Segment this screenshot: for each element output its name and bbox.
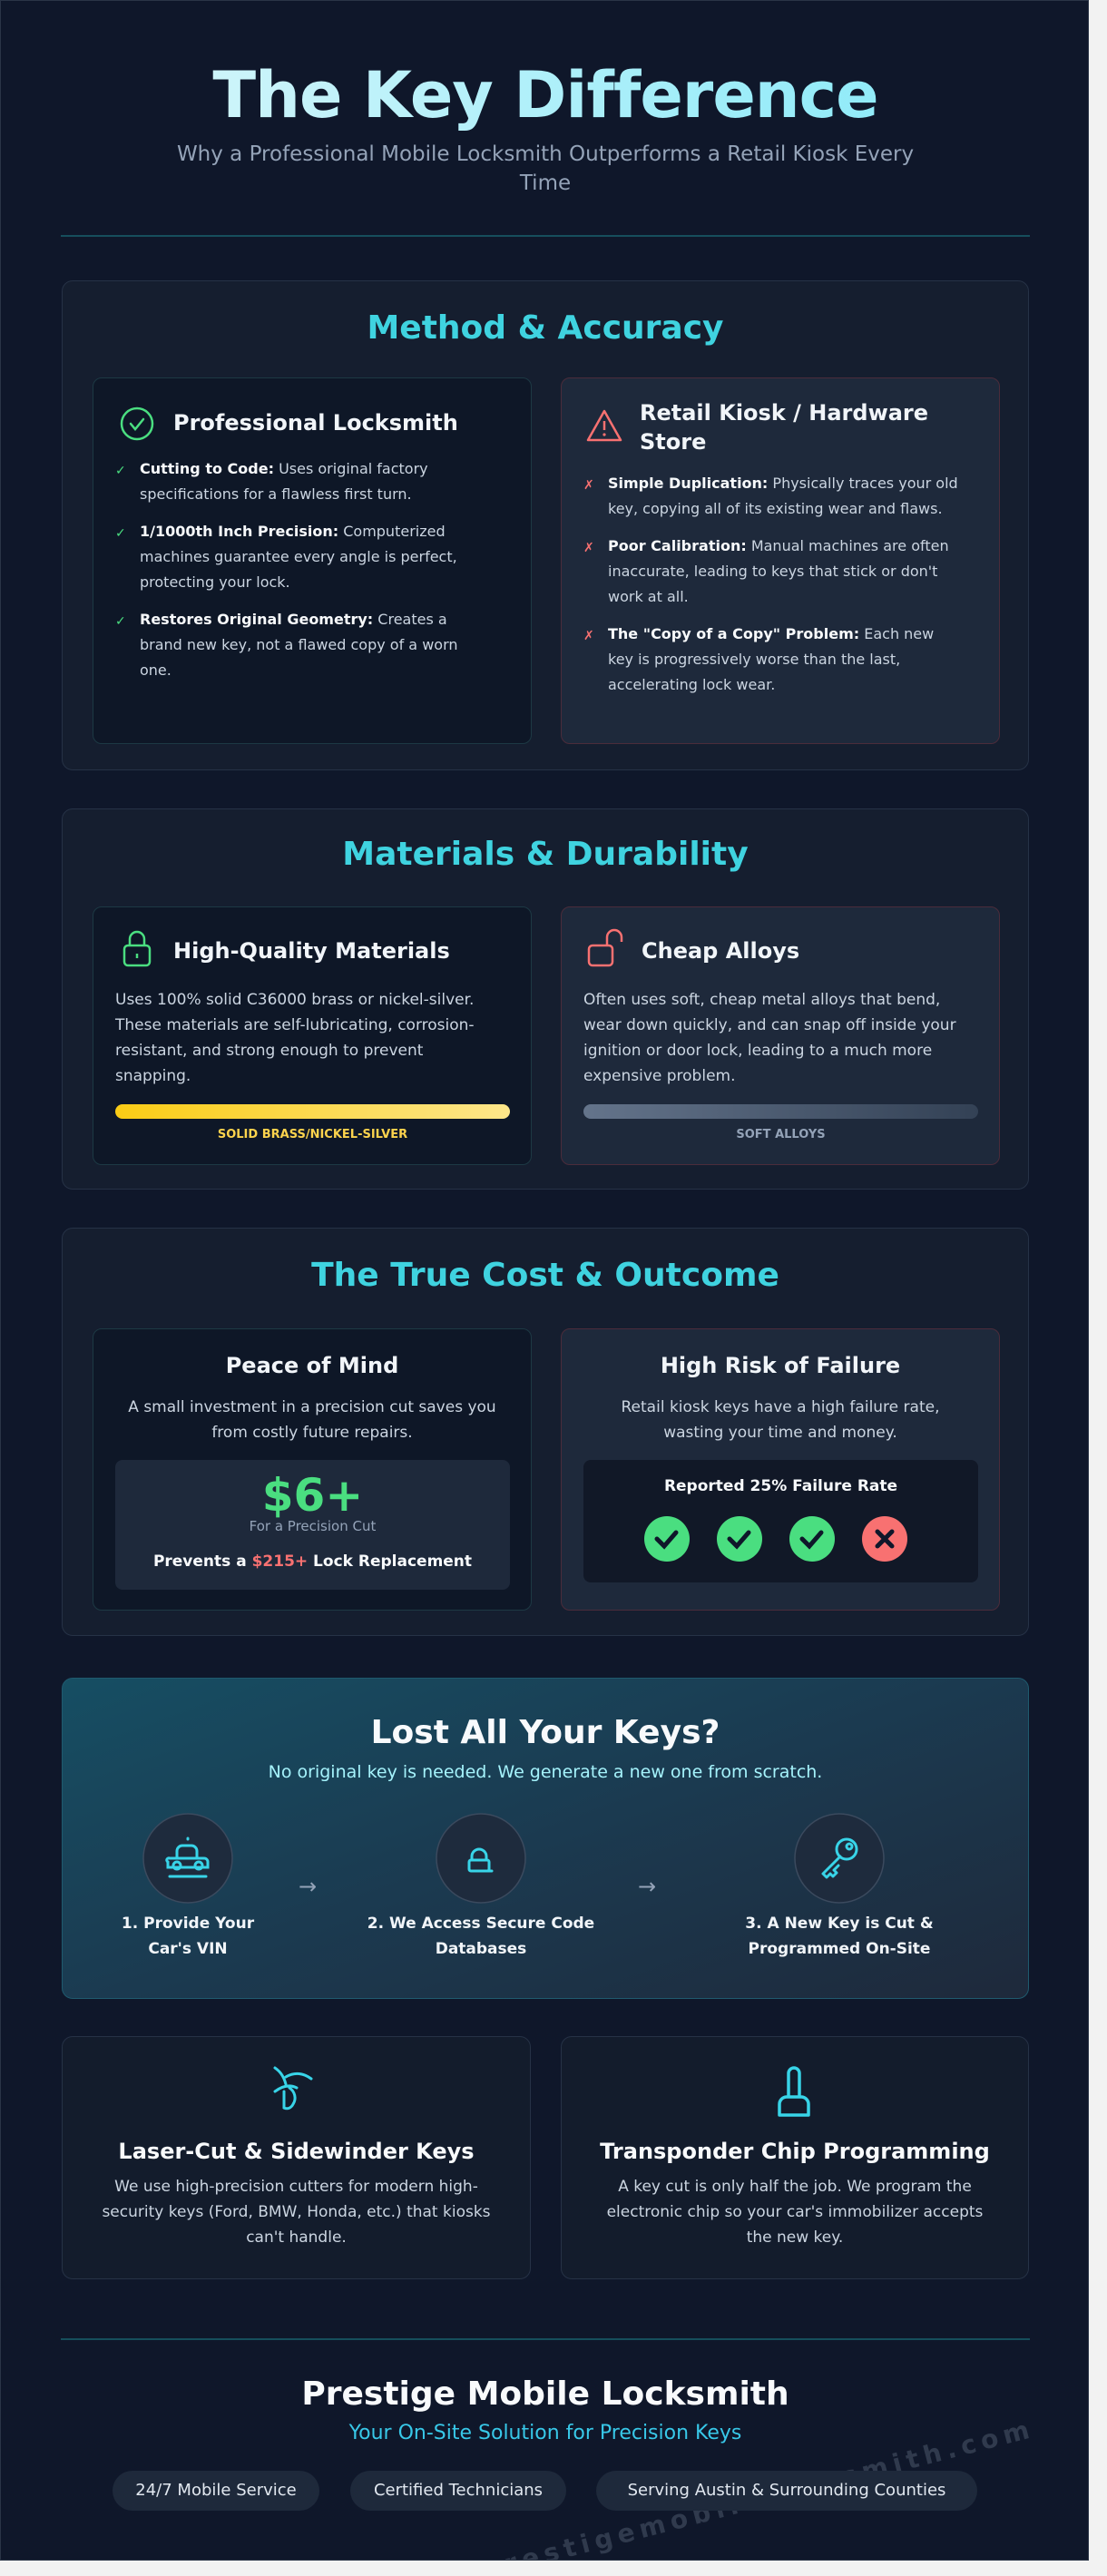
failure box xyxy=(583,1460,978,1582)
heading: Peace of Mind xyxy=(226,1353,398,1378)
caption: For a Precision Cut xyxy=(250,1518,376,1534)
price box xyxy=(115,1460,510,1590)
text: A key cut is only half the job. We program the electronic chip so your car's immobilizer accepts the new key. xyxy=(607,2178,983,2247)
arrow: → xyxy=(299,1874,317,1899)
title: The Key Difference xyxy=(212,58,878,132)
pill: 24/7 xyxy=(113,2471,319,2511)
list: pro points: ✓ xyxy=(115,526,126,541)
text: Uses 100% solid C36000 brass or nickel-silver. These materials are self-lubricating, corrosion-resistant, and strong enough to prevent snapping. xyxy=(115,991,475,1085)
panel: true cost & outcome xyxy=(62,1228,1029,1636)
subtitle: Why a Professional Mobile Locksmith Outperforms a Retail Kiosk Every Time xyxy=(177,142,914,195)
icon: open lock xyxy=(588,929,622,967)
label: 1. Provide Your Car's VIN xyxy=(122,1915,254,1958)
heading: Lost All Your Keys? xyxy=(371,1714,720,1751)
icon: check circle xyxy=(120,406,154,441)
arrow: → xyxy=(638,1874,656,1899)
list: pro points: Cutting to Code: Uses original factory specifications for a flawless first turn. xyxy=(140,460,428,503)
step 2 xyxy=(367,1813,594,1958)
heading: High Risk of Failure xyxy=(661,1353,900,1378)
card: high quality xyxy=(93,906,532,1165)
price: $6+ xyxy=(262,1469,363,1522)
card: peace of mind xyxy=(93,1328,532,1611)
subheading: No original key is needed. We generate a new one from scratch. xyxy=(269,1762,822,1782)
label: 3. A New Key is Cut & Programmed On-Site xyxy=(745,1915,934,1958)
list: pro points: 1/1000th Inch Precision: Computerized machines guarantee every angle is perfect, protecting your lock. xyxy=(140,523,457,591)
card: transponder xyxy=(561,2036,1029,2279)
list: pro points xyxy=(115,460,457,679)
pill: certified: Certified Technicians xyxy=(374,2481,543,2500)
list: kiosk points: ✗ xyxy=(583,541,594,555)
heading: Retail Kiosk / Hardware Store xyxy=(640,400,928,455)
heading: The True Cost & Outcome xyxy=(311,1257,779,1294)
heading: method & accuracy: Method & Accuracy xyxy=(367,309,724,347)
step 3 xyxy=(745,1813,934,1958)
pill: serving: Serving Austin & Surrounding Counties xyxy=(628,2481,945,2500)
panel: method & accuracy xyxy=(62,280,1029,770)
footer: brand name: Prestige Mobile Locksmith xyxy=(301,2375,789,2413)
list: kiosk points: ✗ xyxy=(583,478,594,493)
footer: tagline: Your On-Site Solution for Precision Keys xyxy=(349,2422,741,2444)
title xyxy=(1,55,1090,135)
card: retail kiosk xyxy=(561,377,1000,744)
heading: Materials & Durability xyxy=(342,836,749,873)
bar: brass xyxy=(115,1104,510,1119)
label: Reported 25% Failure Rate xyxy=(664,1477,897,1495)
prevents: Prevents a $215+ Lock Replacement xyxy=(153,1552,472,1571)
list: kiosk points xyxy=(583,475,958,693)
list: kiosk points: The "Copy of a Copy" Problem: Each new key is progressively worse than the last, accelerating lock wear. xyxy=(608,625,934,693)
heading: Transponder Chip Programming xyxy=(600,2139,990,2164)
icons: results xyxy=(644,1516,907,1562)
card: laser-cut keys xyxy=(62,2036,531,2279)
list: kiosk points: Poor Calibration: Manual machines are often inaccurate, leading to keys that stick or don't work at all. xyxy=(608,537,949,605)
card: cheap alloys xyxy=(561,906,1000,1165)
list: pro points: ✓ xyxy=(115,464,126,478)
icon: warning xyxy=(586,410,622,441)
pill: serving xyxy=(596,2471,977,2511)
list: kiosk points: Simple Duplication: Physically traces your old key, copying all of its existing wear and flaws. xyxy=(608,475,958,517)
heading: Cheap Alloys xyxy=(642,938,799,964)
pill: 24/7: 24/7 Mobile Service xyxy=(135,2481,297,2500)
icon: chip xyxy=(778,2066,810,2117)
text: Retail kiosk keys have a high failure rate, wasting your time and money. xyxy=(621,1398,939,1442)
list: pro points: ✓ xyxy=(115,614,126,629)
list: pro points: Restores Original Geometry: Creates a brand new key, not a flawed copy of a worn one. xyxy=(140,611,457,679)
label: SOFT ALLOYS xyxy=(736,1128,826,1141)
card: high risk xyxy=(561,1328,1000,1611)
heading: Professional Locksmith xyxy=(173,410,458,436)
icon: sidewinder key xyxy=(273,2066,313,2111)
list: kiosk points: ✗ xyxy=(583,629,594,643)
heading: Laser-Cut & Sidewinder Keys xyxy=(118,2139,475,2164)
icon: lock green xyxy=(123,931,151,967)
text: A small investment in a precision cut saves you from costly future repairs. xyxy=(128,1398,496,1442)
label: 2. We Access Secure Code Databases xyxy=(367,1915,594,1958)
icon: key xyxy=(794,1813,885,1904)
card: professional locksmith xyxy=(93,377,532,744)
panel: materials & durability xyxy=(62,808,1029,1190)
panel: lost all your keys xyxy=(62,1678,1029,1999)
text: We use high-precision cutters for modern high-security keys (Ford, BMW, Honda, etc.) that kiosks can't handle. xyxy=(102,2178,491,2247)
step 1 xyxy=(122,1813,254,1958)
icon: database lock xyxy=(436,1813,526,1904)
text: Often uses soft, cheap metal alloys that bend, wear down quickly, and can snap off inside your ignition or door lock, leading to a much more expensive problem. xyxy=(583,991,956,1085)
bar: soft alloys xyxy=(583,1104,978,1119)
label: SOLID BRASS/NICKEL-SILVER xyxy=(218,1128,407,1141)
icon: car xyxy=(142,1813,233,1904)
pill: certified xyxy=(350,2471,566,2511)
heading: High-Quality Materials xyxy=(173,938,450,964)
